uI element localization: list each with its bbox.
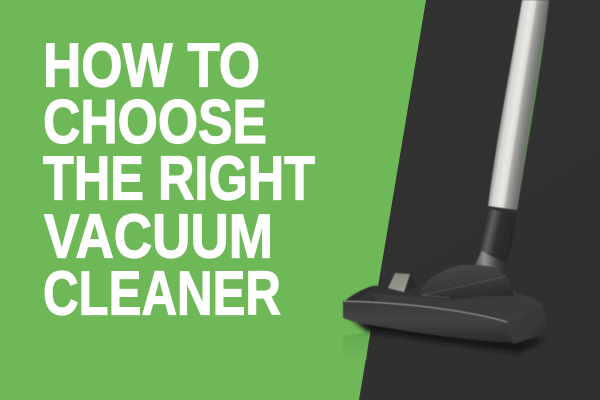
panel: green diagonal — [0, 0, 426, 400]
title: CLEANER — [43, 260, 281, 328]
nozzle top — [343, 284, 543, 323]
pedal — [388, 273, 417, 292]
nozzle reflection on green — [343, 332, 369, 360]
rear wheel knob — [503, 290, 517, 298]
neck — [476, 207, 516, 272]
title — [43, 32, 315, 328]
nozzle right facet — [507, 305, 547, 344]
title: HOW TO — [43, 32, 260, 100]
nozzle rim highlight — [344, 301, 507, 322]
hood — [417, 265, 514, 300]
title: VACUUM — [44, 202, 273, 272]
illustration: vacuum cleaner — [343, 0, 549, 360]
nozzle body — [343, 301, 513, 343]
nozzle shadow — [352, 320, 545, 353]
vacuum tube — [488, 0, 549, 210]
title: THE RIGHT — [43, 144, 315, 214]
nozzle raised panel — [368, 293, 540, 318]
title: CHOOSE — [43, 88, 267, 157]
neck collar — [475, 251, 507, 272]
hood seam — [421, 276, 506, 298]
